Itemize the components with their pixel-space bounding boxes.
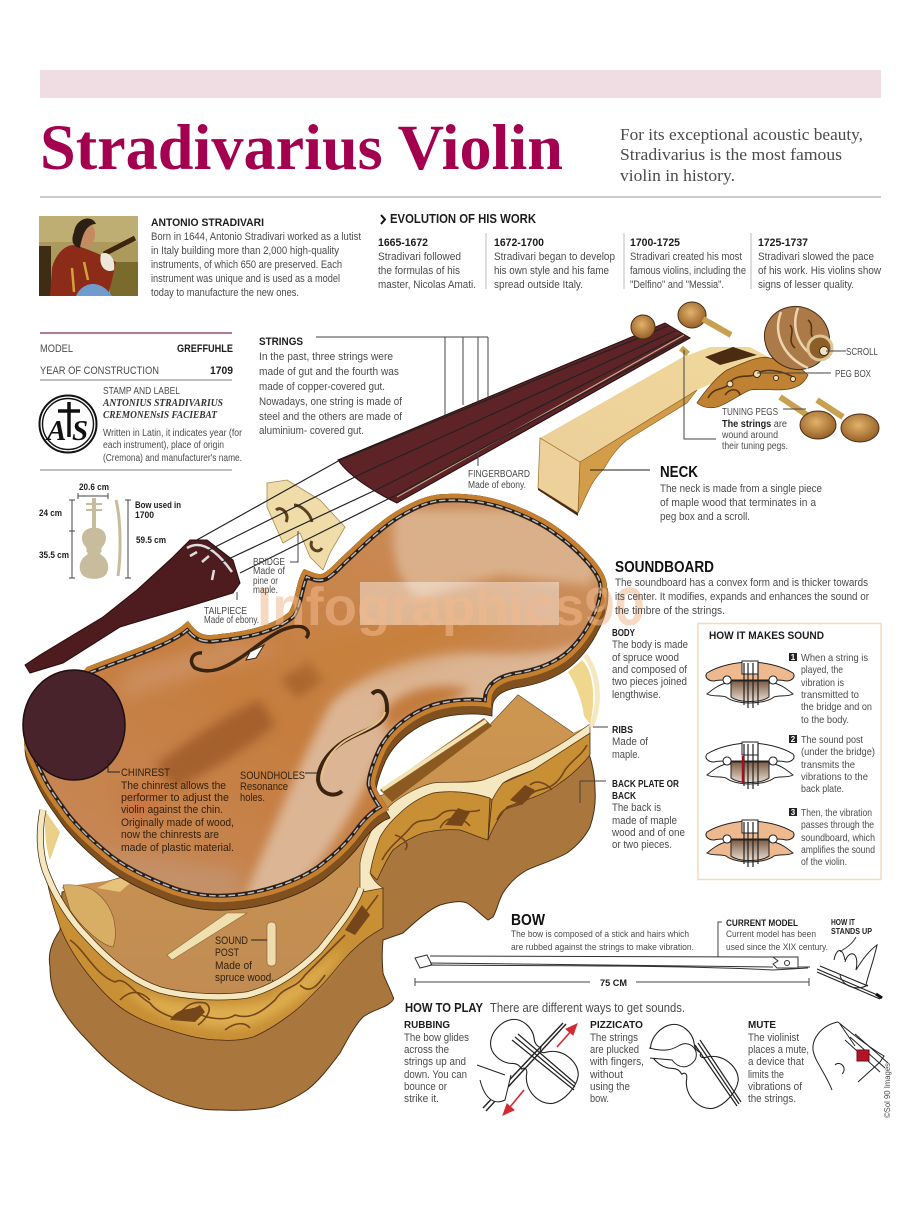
stamp and label text <box>102 386 243 464</box>
pizzicato text: bow. <box>590 1093 609 1105</box>
stamp and label text: (Cremona) and manufacturer's name. <box>103 453 242 464</box>
back plate label: or two pieces. <box>612 839 672 851</box>
biography text <box>151 217 361 299</box>
neck end face <box>538 438 580 513</box>
rubbing text: The bow glides <box>404 1032 469 1044</box>
timeline 1665-1672: 1665-1672 <box>378 237 428 249</box>
stamp emblem: A <box>45 415 66 447</box>
timeline 1672-1700: his own style and his fame <box>494 265 609 277</box>
soundholes label <box>240 770 319 804</box>
rubbing text <box>404 1019 469 1105</box>
tuning pegs label: TUNING PEGS <box>722 407 778 418</box>
body label: BODY <box>612 628 635 639</box>
peg box <box>697 357 808 408</box>
scroll and peg box labels: PEG BOX <box>835 369 871 380</box>
violin size diagram: 24 cm <box>39 508 62 518</box>
wood grain shading <box>90 510 600 905</box>
step 1 text: the bridge and on <box>801 701 872 713</box>
step 3 text: of the violin. <box>801 856 847 868</box>
lower soundhole <box>318 691 387 795</box>
back plate label: BACK PLATE OR <box>612 779 680 790</box>
step 3 text: 3 <box>791 808 796 817</box>
soundboard thickness <box>25 502 608 910</box>
back plate label: made of maple <box>612 815 677 827</box>
mute text: the strings. <box>748 1093 796 1105</box>
bridge cut-outs <box>276 505 322 551</box>
scroll and peg box labels <box>757 347 878 409</box>
inner wall highlight <box>97 874 140 892</box>
stamp and label text: each instrument), place of origin <box>103 440 224 451</box>
bridge label: pine or <box>253 576 279 587</box>
neck top surface <box>540 347 770 462</box>
scroll <box>753 295 841 381</box>
soundboard <box>20 490 620 920</box>
timeline 1725-1737: of his work. His violins show <box>758 265 881 277</box>
timeline 1725-1737 <box>758 237 881 291</box>
tailpiece <box>25 540 240 673</box>
lower decorated rib <box>47 880 383 1040</box>
timeline 1725-1737: signs of lesser quality. <box>758 279 854 291</box>
step 3 text: amplifies the sound <box>801 844 875 856</box>
how to play heading <box>405 1000 685 1015</box>
timeline 1672-1700: Stradivari began to develop <box>494 251 615 263</box>
bridge label: maple. <box>253 585 278 596</box>
mute text: a device that <box>748 1056 804 1068</box>
sound post: spruce wood. <box>215 972 274 984</box>
mute text <box>748 1019 809 1105</box>
soundholes label: SOUNDHOLES <box>240 770 305 782</box>
bridge <box>267 480 345 570</box>
body label: and composed of <box>612 664 688 676</box>
step 1 text: vibration is <box>801 677 844 689</box>
bass bar <box>167 913 247 960</box>
bow length dimension: 75 CM <box>600 978 627 989</box>
back plate <box>49 695 595 1110</box>
rubbing text: across the <box>404 1044 449 1056</box>
watermark: Infographics90 <box>257 577 645 637</box>
strings text <box>259 336 403 437</box>
pizzicato text: PIZZICATO <box>590 1019 643 1031</box>
subtitle: Stradivarius is the most famous <box>620 145 842 164</box>
right band of middle rib <box>488 733 590 840</box>
griffin ornament <box>170 905 370 1022</box>
violin size diagram: 59.5 cm <box>136 535 166 545</box>
step 1 text: 1 <box>791 653 796 662</box>
violin size diagram <box>39 482 181 579</box>
biography text: instruments, of which 650 are preserved. Each <box>151 259 342 271</box>
middle cream rib edge <box>360 724 590 893</box>
step 2 text <box>789 734 875 795</box>
step 1 text: transmitted to <box>801 689 859 701</box>
soundpost-side stick <box>380 718 492 802</box>
fingerboard label <box>468 452 530 491</box>
tuning pegs label: The strings are <box>722 419 787 430</box>
step 2 text: The sound post <box>801 734 863 746</box>
rubbing text: strings up and <box>404 1056 466 1068</box>
tuning peg heads <box>631 315 655 339</box>
bridge label <box>253 531 298 596</box>
mute illustration <box>813 1022 888 1090</box>
mute text: limits the <box>748 1069 784 1081</box>
step 1 text: played, the <box>801 664 843 676</box>
left band of middle rib <box>370 792 490 880</box>
scroll ridges <box>778 308 822 368</box>
model table: 1709 <box>210 365 233 377</box>
chinrest label: made of plastic material. <box>121 842 234 854</box>
chinrest label: violin against the chin. <box>121 804 223 816</box>
rubbing text: RUBBING <box>404 1019 450 1031</box>
fingerboard edge highlight <box>397 335 684 497</box>
evolution heading: EVOLUTION OF HIS WORK <box>390 212 536 226</box>
pizzicato text: using the <box>590 1081 630 1093</box>
tuning pegs label: their tuning pegs. <box>722 441 788 452</box>
timeline 1700-1725: "Delfino" and "Messia". <box>630 279 724 291</box>
panel heading: HOW IT MAKES SOUND <box>709 630 824 642</box>
stamp and label text: CREMONENsIS FACIEBAT <box>103 410 218 421</box>
bow drawing <box>415 955 810 970</box>
step 2 text: 2 <box>791 735 796 744</box>
tuning pegs label <box>684 350 788 452</box>
lower cream ring fill <box>40 810 361 997</box>
stamp and label text: ANTONIUS STRADIVARIUS <box>102 398 223 409</box>
tuning pegs label: wound around <box>721 430 778 441</box>
griffin ornament right <box>510 785 535 805</box>
rubbing text: down. You can <box>404 1069 467 1081</box>
step 1 text: to the body. <box>801 714 849 726</box>
step 3 text: Then, the vibration <box>801 807 872 819</box>
step 2 text: (under the bridge) <box>801 746 875 758</box>
timeline 1725-1737: Stradivari slowed the pace <box>758 251 874 263</box>
scroll and peg box labels: SCROLL <box>846 347 878 358</box>
bow text: The bow is composed of a stick and hairs which <box>511 929 689 940</box>
step 1 diagram <box>706 661 794 708</box>
back plate label: wood and of one <box>611 827 685 839</box>
left inner wall <box>45 812 60 860</box>
left band ornament <box>382 810 480 860</box>
timeline 1672-1700: 1672-1700 <box>494 237 544 249</box>
subtitle: violin in history. <box>620 166 735 185</box>
biography text: today to manufacture the new ones. <box>151 287 299 299</box>
how to play heading: There are different ways to get sounds. <box>490 1001 685 1015</box>
right inner wall <box>568 660 593 724</box>
chinrest <box>23 670 125 780</box>
strings text: Nowadays, one string is made of <box>259 396 403 408</box>
how to play heading: HOW TO PLAY <box>405 1000 483 1015</box>
credit: ©Sol 90 Images <box>883 1063 892 1118</box>
step 2 diagram <box>706 742 794 789</box>
chinrest label: now the chinrests are <box>121 829 219 841</box>
timeline 1665-1672: master, Nicolas Amati. <box>378 279 476 291</box>
portrait of Antonio Stradivari <box>39 216 138 296</box>
chinrest label: CHINREST <box>121 767 170 779</box>
model table: MODEL <box>40 343 73 355</box>
biography text: in Italy building more than 2,000 high-quality <box>151 245 339 257</box>
sound post: Made of <box>215 960 253 972</box>
strings text: made of gut and the fourth was <box>259 366 399 378</box>
soundholes label: holes. <box>240 792 265 804</box>
pizzicato illustration <box>640 1013 747 1117</box>
soundholes label: Resonance <box>240 781 288 793</box>
model table <box>40 333 233 470</box>
body label: two pieces joined <box>612 676 687 688</box>
current model text: Current model has been <box>726 929 816 940</box>
chinrest label: The chinrest allows the <box>121 780 226 792</box>
timeline 1672-1700 <box>494 237 615 291</box>
title: Stradivarius Violin <box>40 112 563 184</box>
step 2 text: transmits the <box>801 759 855 771</box>
timeline 1725-1737: 1725-1737 <box>758 237 808 249</box>
ribs label: Made of <box>612 736 649 748</box>
bridge label: Made of <box>253 566 285 577</box>
model table: GREFFUHLE <box>177 343 233 355</box>
bow text: are rubbed against the strings to make vibration. <box>511 942 694 953</box>
strings text: made of copper-covered gut. <box>259 381 385 393</box>
current model text <box>718 918 828 957</box>
hand holding bow <box>817 945 882 999</box>
pizzicato text: The strings <box>590 1032 638 1044</box>
bow text <box>511 912 694 953</box>
body label: The body is made <box>612 639 688 651</box>
rubbing illustration <box>477 1008 587 1115</box>
violin size diagram: 1700 <box>135 510 154 520</box>
stamp emblem <box>40 396 96 452</box>
sound post <box>215 922 276 984</box>
right band ornament <box>497 745 587 820</box>
strings leader lines <box>316 337 488 416</box>
lower cream ring <box>40 810 361 997</box>
how it stands up label <box>831 918 873 952</box>
rib ornament <box>70 895 378 1030</box>
step 1 text: When a string is <box>801 652 868 664</box>
step 3 text: soundboard, which <box>801 832 875 844</box>
strings text: aluminium- covered gut. <box>259 425 364 437</box>
biography text: instrument was unique and is used as a model <box>151 273 340 285</box>
violin head <box>538 295 879 516</box>
chinrest label: performer to adjust the <box>121 792 229 804</box>
pizzicato text: with fingers, <box>589 1056 644 1068</box>
pizzicato text: without <box>589 1069 623 1081</box>
neck end-grain base <box>538 488 578 516</box>
scroll eye <box>808 336 832 360</box>
mute text: places a mute, <box>748 1044 809 1056</box>
bow text: BOW <box>511 912 546 929</box>
fingerboard label: FINGERBOARD <box>468 469 530 480</box>
griffin ornament middle <box>445 808 470 826</box>
violin size diagram: 20.6 cm <box>79 482 109 492</box>
strings text: STRINGS <box>259 336 303 348</box>
violin main illustration <box>20 323 690 1110</box>
body label <box>612 628 688 701</box>
soundboard text: The soundboard has a convex form and is thicker towards <box>615 577 868 589</box>
timeline 1665-1672: the formulas of his <box>378 265 460 277</box>
neck side <box>578 390 697 513</box>
how it stands up label: HOW IT <box>831 918 855 927</box>
chinrest label: Originally made of wood, <box>121 817 234 829</box>
stamp and label text: Written in Latin, it indicates year (for <box>103 428 243 439</box>
lower soundhole rim <box>322 712 385 778</box>
neck text: The neck is made from a single piece <box>660 483 822 495</box>
timeline 1700-1725 <box>630 237 746 291</box>
corner block <box>63 885 115 947</box>
neck text: NECK <box>660 464 698 481</box>
timeline 1700-1725: 1700-1725 <box>630 237 680 249</box>
step 1 text <box>789 652 872 726</box>
stamp and label text: STAMP AND LABEL <box>103 386 180 397</box>
body label: of spruce wood <box>612 652 679 664</box>
upper soundhole highlight <box>246 645 264 660</box>
body label: lengthwise. <box>612 689 661 701</box>
current model text: used since the XIX century. <box>726 942 828 953</box>
peg box scrollwork <box>708 370 795 398</box>
timeline 1665-1672 <box>378 237 476 291</box>
how it stands up label: STANDS UP <box>831 927 873 936</box>
back plate label: BACK <box>612 791 637 802</box>
step 2 text: back plate. <box>801 783 844 795</box>
soundboard text: its center. It modifies, expands and enhances the sound or <box>615 591 869 603</box>
violin size diagram: 35.5 cm <box>39 550 69 560</box>
rib golden highlights <box>120 945 345 1028</box>
ribs label <box>593 725 649 761</box>
stamp emblem: S <box>72 415 88 447</box>
subtitle <box>620 125 863 185</box>
ribs label: RIBS <box>612 725 633 736</box>
timeline 1700-1725: Stradivari created his most <box>630 251 742 263</box>
rubbing text: bounce or <box>404 1081 447 1093</box>
sound post: SOUND <box>215 935 248 947</box>
violin size diagram: Bow used in <box>135 500 181 510</box>
neck text: of maple wood that terminates in a <box>660 497 817 509</box>
back plate label: The back is <box>612 802 661 814</box>
peg holes <box>727 370 796 387</box>
panel: how it makes sound <box>698 624 881 880</box>
pizzicato text <box>589 1019 644 1105</box>
strings text: steel and the others are made of <box>259 411 403 423</box>
soundboard text: SOUNDBOARD <box>615 559 714 576</box>
step 2 text: vibrations to the <box>801 771 868 783</box>
pizzicato text: are plucked <box>590 1044 639 1056</box>
fingerboard label: Made of ebony. <box>468 480 526 491</box>
subtitle: For its exceptional acoustic beauty, <box>620 125 863 144</box>
timeline 1700-1725: famous violins, including the <box>630 265 746 277</box>
model table: YEAR OF CONSTRUCTION <box>40 365 159 377</box>
tailpiece label <box>204 592 259 626</box>
step 3 text <box>789 807 875 868</box>
strings text: In the past, three strings were <box>259 351 393 363</box>
strings <box>195 326 686 573</box>
soundboard text: the timbre of the strings. <box>615 605 725 617</box>
stick highlight <box>382 721 486 790</box>
rubbing text: strike it. <box>404 1093 439 1105</box>
biography text: Born in 1644, Antonio Stradivari worked as a lutist <box>151 231 361 243</box>
neck text: peg box and a scroll. <box>660 511 750 523</box>
right cream ring <box>585 655 597 727</box>
tailpiece label: TAILPIECE <box>204 606 247 617</box>
timeline 1665-1672: Stradivari followed <box>378 251 461 263</box>
mute text: MUTE <box>748 1019 776 1031</box>
tailpiece fittings <box>187 545 232 580</box>
top banner <box>40 70 881 98</box>
neck text <box>590 464 822 523</box>
timeline 1672-1700: spread outside Italy. <box>494 279 583 291</box>
step 3 text: passes through the <box>801 819 874 831</box>
bridge label: BRIDGE <box>253 557 285 568</box>
chinrest label <box>108 760 234 854</box>
scroll ornament <box>790 320 814 348</box>
tailpiece label: Made of ebony. <box>204 615 259 626</box>
mute text: The violinist <box>748 1032 799 1044</box>
mute text: vibrations of <box>748 1081 803 1093</box>
back plate label <box>580 779 685 851</box>
upper soundhole <box>191 626 308 671</box>
ribs label: maple. <box>612 749 640 761</box>
biography text: ANTONIO STRADIVARI <box>151 217 264 229</box>
step 3 diagram <box>706 820 794 867</box>
sound post: POST <box>215 947 239 959</box>
bow length dimension <box>415 978 809 989</box>
current model text: CURRENT MODEL <box>726 918 798 929</box>
fingerboard <box>338 323 690 503</box>
peg box opening <box>705 347 757 365</box>
inner surface of back plate <box>62 695 590 997</box>
soundboard text <box>615 559 869 617</box>
